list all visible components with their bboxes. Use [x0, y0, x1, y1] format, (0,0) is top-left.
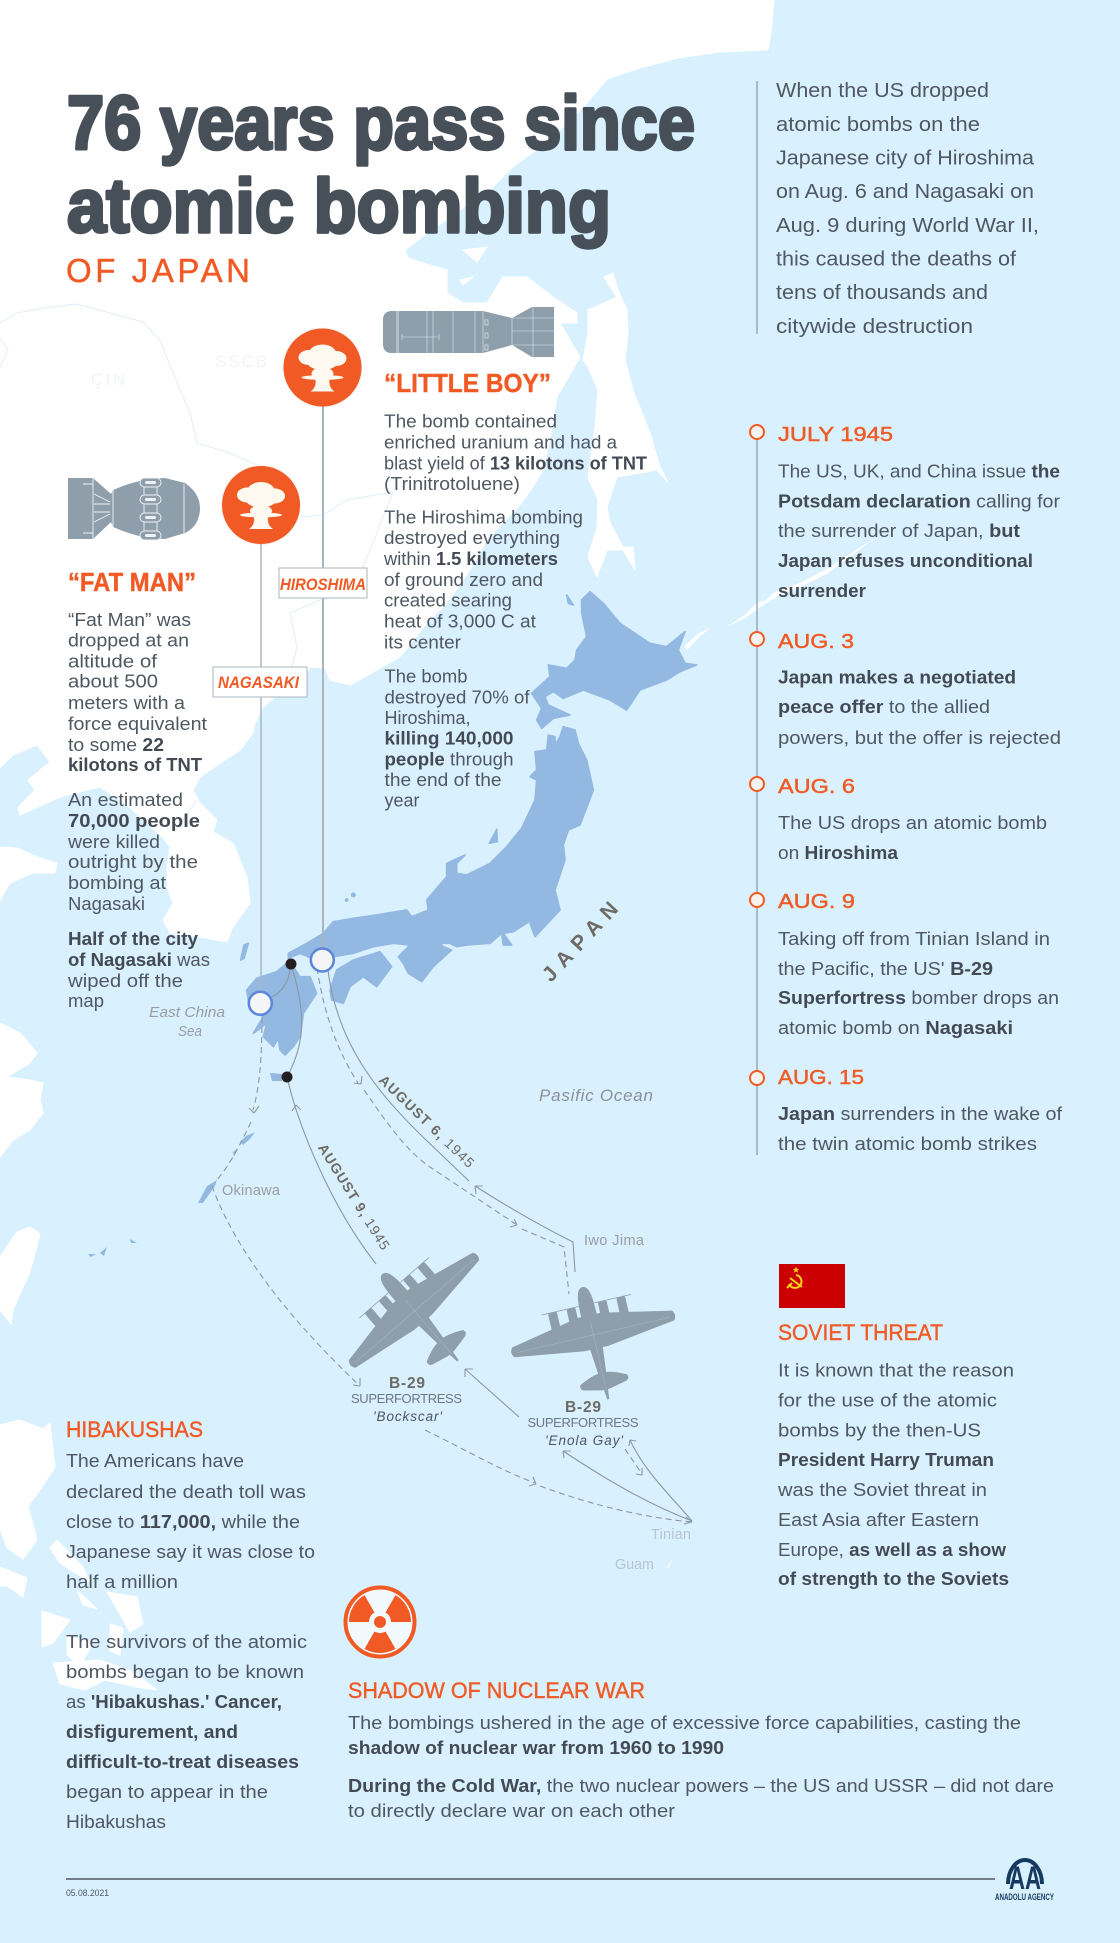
- text: Fat Man description: Half of the city: [68, 928, 199, 949]
- text: Fat Man description: altitude of: [68, 650, 158, 671]
- text: Fat Man description: to some 22: [68, 734, 164, 755]
- text: Hibakushas body: began to appear in the: [66, 1781, 268, 1802]
- text: Little Boy description: destroyed everything: [384, 527, 560, 548]
- intro text block: citywide destruction: [776, 315, 973, 338]
- text: Soviet threat body: for the use of the atomic: [778, 1390, 997, 1411]
- panel: Little Boy: [383, 370, 648, 811]
- timeline item: Aug. 15: [750, 1066, 1063, 1154]
- text: Shadow of nuclear war body: During the Cold War, the two nuclear powers – the US and USSR – did not dare: [348, 1775, 1054, 1796]
- connector lines from bomb circles to cities: [261, 400, 323, 995]
- text: Little Boy description: killing 140,000: [384, 728, 514, 749]
- intro text block: Japanese city of Hiroshima: [776, 146, 1035, 170]
- text: Fat Man description: kilotons of TNT: [68, 754, 203, 775]
- text: Soviet threat body: Europe, as well as a show: [778, 1539, 1007, 1560]
- subtitle: OF JAPAN: [66, 252, 250, 289]
- timeline item: Aug. 15: AUG. 15: [778, 1066, 864, 1089]
- flight routes: [212, 964, 692, 1524]
- label: Enola Gay: SUPERFORTRESS: [528, 1415, 639, 1430]
- text: Little Boy description: of ground zero and: [384, 569, 543, 590]
- timeline item: Aug. 6: The US drops an atomic bomb: [778, 812, 1047, 833]
- text: Little Boy description: heat of 3,000 C at: [384, 611, 536, 632]
- panel: Hibakushas: [66, 1417, 315, 1832]
- map label: SSCB: SSCB: [215, 352, 267, 371]
- text: Little Boy description: blast yield of 13 kilotons of TNT: [384, 452, 648, 473]
- footer rule: [66, 1878, 995, 1880]
- text: Little Boy description: the end of the: [384, 769, 502, 790]
- text: Little Boy description: (Trinitrotoluene): [384, 473, 520, 494]
- timeline item: Aug. 15: Japan surrenders in the wake of: [778, 1103, 1063, 1124]
- marker: Hiroshima: [311, 948, 334, 972]
- text: Little Boy description: The Hiroshima bombing: [384, 506, 583, 527]
- text: Fat Man description: of Nagasaki was: [68, 949, 210, 970]
- map: Japan: [88, 592, 697, 1257]
- label: Bockscar: 'Bockscar': [373, 1409, 442, 1424]
- icon: Soviet flag: [779, 1264, 845, 1308]
- text: Hibakushas body: bombs began to be known: [66, 1661, 304, 1682]
- title: 76 years pass since: [67, 81, 695, 166]
- icon: B-29 Enola Gay plane: [501, 1268, 690, 1418]
- text: Shadow of nuclear war body: shadow of nuclear war from 1960 to 1990: [348, 1737, 724, 1758]
- route label: August 9, 1945: AUGUST 9, 1945: [315, 1141, 393, 1253]
- map: country borders: [0, 304, 393, 832]
- title: atomic bombing: [67, 164, 611, 249]
- heading: Shadow of nuclear war: SHADOW OF NUCLEAR WAR: [348, 1678, 645, 1703]
- map label: Tinian: Tinian: [651, 1527, 691, 1543]
- icon: radiation symbol: [346, 1588, 414, 1656]
- label: Hiroshima: [279, 568, 367, 598]
- heading: Hibakushas: HIBAKUSHAS: [66, 1417, 203, 1442]
- logo: Anadolu Agency: [995, 1860, 1054, 1902]
- timeline item: July 1945: surrender: [778, 580, 866, 601]
- label: Hiroshima: HIROSHIMA: [280, 576, 366, 594]
- text: Soviet threat body: [777, 1360, 1014, 1589]
- marker: Tanegashima waypoint: [282, 1072, 292, 1082]
- text: Shadow of nuclear war body: to directly declare war on each other: [348, 1800, 675, 1821]
- text: Little Boy description: within 1.5 kilometers: [383, 548, 558, 569]
- intro text block: this caused the deaths of: [776, 248, 1016, 270]
- text: Hibakushas body: close to 117,000, while the: [66, 1511, 300, 1532]
- text: Fat Man description: about 500: [68, 671, 158, 692]
- text: Hibakushas body: Japanese say it was close to: [66, 1541, 315, 1562]
- text: Soviet threat body: of strength to the Soviets: [778, 1568, 1009, 1589]
- map label: CIN: ÇIN: [91, 370, 125, 389]
- map: surrounding land: [0, 0, 875, 1690]
- timeline item: Aug. 3: powers, but the offer is rejected: [778, 727, 1061, 748]
- icon: B-29 Bockscar plane: [319, 1219, 521, 1416]
- timeline item: Aug. 3: peace offer to the allied: [778, 696, 990, 717]
- map label: East China Sea: [149, 1005, 225, 1040]
- text: Fat Man description: Nagasaki: [68, 893, 145, 914]
- map label: East China Sea: Sea: [178, 1024, 202, 1040]
- timeline item: Aug. 9: Taking off from Tinian Island in: [778, 928, 1050, 949]
- city markers: [249, 948, 334, 1082]
- timeline item: July 1945: Potsdam declaration calling for: [778, 490, 1060, 512]
- text: Hibakushas body: The Americans have: [66, 1450, 244, 1471]
- text: Soviet threat body: bombs by the then-US: [778, 1420, 981, 1441]
- timeline item: Aug. 15: the twin atomic bomb strikes: [778, 1133, 1037, 1154]
- timeline item: Aug. 9: the Pacific, the US' B-29: [778, 958, 993, 979]
- heading: Fat Man: “FAT MAN”: [68, 569, 196, 597]
- heading: Soviet threat: SOVIET THREAT: [778, 1320, 943, 1345]
- text: Hibakushas body: difficult-to-treat diseases: [66, 1751, 299, 1772]
- timeline item: July 1945: The US, UK, and China issue the: [778, 461, 1060, 482]
- title: [67, 81, 695, 249]
- text: Soviet threat body: President Harry Truman: [778, 1449, 994, 1470]
- intro text block: Aug. 9 during World War II,: [776, 214, 1039, 237]
- text: Shadow of nuclear war body: [348, 1712, 1054, 1821]
- map label: Pacific Ocean: Pasific Ocean: [539, 1086, 653, 1105]
- text: Fat Man description: dropped at an: [68, 630, 189, 651]
- label: Bockscar: [351, 1375, 462, 1424]
- timeline item: Aug. 6: on Hiroshima: [778, 842, 899, 863]
- icon: Guam island: [666, 1560, 672, 1569]
- timeline item: Aug. 9: Superfortress bomber drops an: [778, 987, 1059, 1008]
- timeline item: Aug. 6: [750, 775, 1047, 863]
- text: Fat Man description: outright by the: [68, 851, 198, 872]
- icon: fat man bomb: [68, 478, 200, 540]
- map label: Guam: Guam: [615, 1557, 654, 1573]
- text: Hibakushas body: The survivors of the atomic: [66, 1631, 307, 1652]
- text: Fat Man description: bombing at: [68, 872, 166, 893]
- text: Fat Man description: “Fat Man” was: [68, 609, 191, 630]
- intro text block: tens of thousands and: [776, 281, 988, 304]
- text: Little Boy description: its center: [384, 631, 461, 652]
- text: Little Boy description: Hiroshima,: [384, 707, 470, 728]
- text: Hibakushas body: declared the death toll was: [66, 1481, 306, 1502]
- text: Fat Man description: meters with a: [68, 692, 186, 713]
- timeline item: Aug. 3: [750, 630, 1061, 748]
- text: Shadow of nuclear war body: The bombings ushered in the age of excessive force capabilities, casting the: [348, 1712, 1021, 1733]
- text: Fat Man description: [67, 609, 210, 1011]
- route label: August 6, 1945: AUGUST 6, 1945: [376, 1072, 478, 1171]
- intro text block: [757, 79, 1039, 338]
- timeline item: Aug. 9: AUG. 9: [778, 890, 855, 913]
- text: Hibakushas body: [66, 1450, 315, 1832]
- timeline item: Aug. 6: AUG. 6: [778, 775, 855, 798]
- text: Soviet threat body: East Asia after Eastern: [778, 1509, 979, 1530]
- panel: Fat Man: [67, 569, 210, 1011]
- marker: Kokura waypoint: [286, 958, 296, 970]
- timeline: [750, 423, 1063, 1155]
- text: Fat Man description: 70,000 people: [68, 810, 200, 831]
- text: Hibakushas body: Hibakushas: [66, 1811, 166, 1832]
- label: Bockscar: B-29: [389, 1375, 425, 1392]
- timeline item: July 1945: the surrender of Japan, but: [778, 520, 1020, 541]
- label: Enola Gay: B-29: [565, 1399, 601, 1416]
- text: Fat Man description: wiped off the: [67, 970, 183, 991]
- label: Nagasaki: [213, 667, 307, 697]
- heading: Little Boy: “LITTLE BOY”: [384, 370, 551, 398]
- text: Little Boy description: destroyed 70% of: [384, 686, 530, 707]
- text: Little Boy description: year: [384, 790, 420, 811]
- label: Enola Gay: 'Enola Gay': [545, 1433, 623, 1448]
- timeline item: July 1945: Japan refuses unconditional: [778, 550, 1033, 571]
- marker: Nagasaki: [249, 992, 272, 1015]
- label: Bockscar: SUPERFORTRESS: [351, 1391, 462, 1406]
- panel: Shadow of nuclear war: [348, 1678, 1054, 1821]
- timeline item: Aug. 3: Japan makes a negotiated: [778, 667, 1016, 688]
- text: Little Boy description: [383, 411, 648, 811]
- text: Little Boy description: enriched uranium and had a: [384, 431, 618, 452]
- icon: mushroom cloud Hiroshima: [282, 328, 362, 408]
- map label: Japan: JAPAN: [538, 898, 623, 986]
- label: Enola Gay: [528, 1399, 639, 1448]
- intro text block: on Aug. 6 and Nagasaki on: [776, 180, 1034, 203]
- map label: East China Sea: East China: [149, 1005, 225, 1021]
- map label: Iwo Jima: Iwo Jima: [584, 1233, 645, 1249]
- intro text block: atomic bombs on the: [776, 113, 980, 136]
- text: Fat Man description: map: [68, 990, 104, 1011]
- text: Hibakushas body: disfigurement, and: [66, 1721, 238, 1742]
- timeline item: Aug. 9: atomic bomb on Nagasaki: [778, 1017, 1013, 1038]
- panel: Soviet threat: [777, 1320, 1014, 1589]
- text: Little Boy description: people through: [384, 748, 514, 769]
- label: Nagasaki: NAGASAKI: [218, 674, 299, 692]
- text: Hibakushas body: half a million: [66, 1571, 178, 1592]
- timeline item: Aug. 3: AUG. 3: [778, 630, 854, 653]
- text: Fat Man description: force equivalent: [68, 713, 207, 734]
- intro text block: When the US dropped: [776, 79, 989, 102]
- icon: mushroom cloud Nagasaki: [221, 465, 301, 545]
- map label: Okinawa: Okinawa: [222, 1183, 281, 1199]
- logo: Anadolu Agency: AA: [1009, 1860, 1041, 1896]
- logo: Anadolu Agency: ANADOLU AGENCY: [995, 1892, 1054, 1902]
- text: Little Boy description: The bomb contained: [384, 411, 557, 432]
- text: Fat Man description: An estimated: [68, 789, 183, 810]
- text: Hibakushas body: as 'Hibakushas.' Cancer,: [66, 1691, 282, 1712]
- icon: little boy bomb: [383, 307, 554, 357]
- text: Soviet threat body: It is known that the reason: [778, 1360, 1014, 1381]
- text: Little Boy description: The bomb: [384, 666, 468, 687]
- timeline item: July 1945: [750, 423, 1060, 601]
- timeline item: Aug. 9: [750, 890, 1059, 1038]
- text: Soviet threat body: was the Soviet threat in: [777, 1479, 987, 1500]
- text: Little Boy description: created searing: [384, 590, 512, 611]
- text: Fat Man description: were killed: [67, 831, 160, 852]
- date: 05.08.2021: [66, 1888, 109, 1898]
- timeline item: July 1945: JULY 1945: [778, 423, 893, 446]
